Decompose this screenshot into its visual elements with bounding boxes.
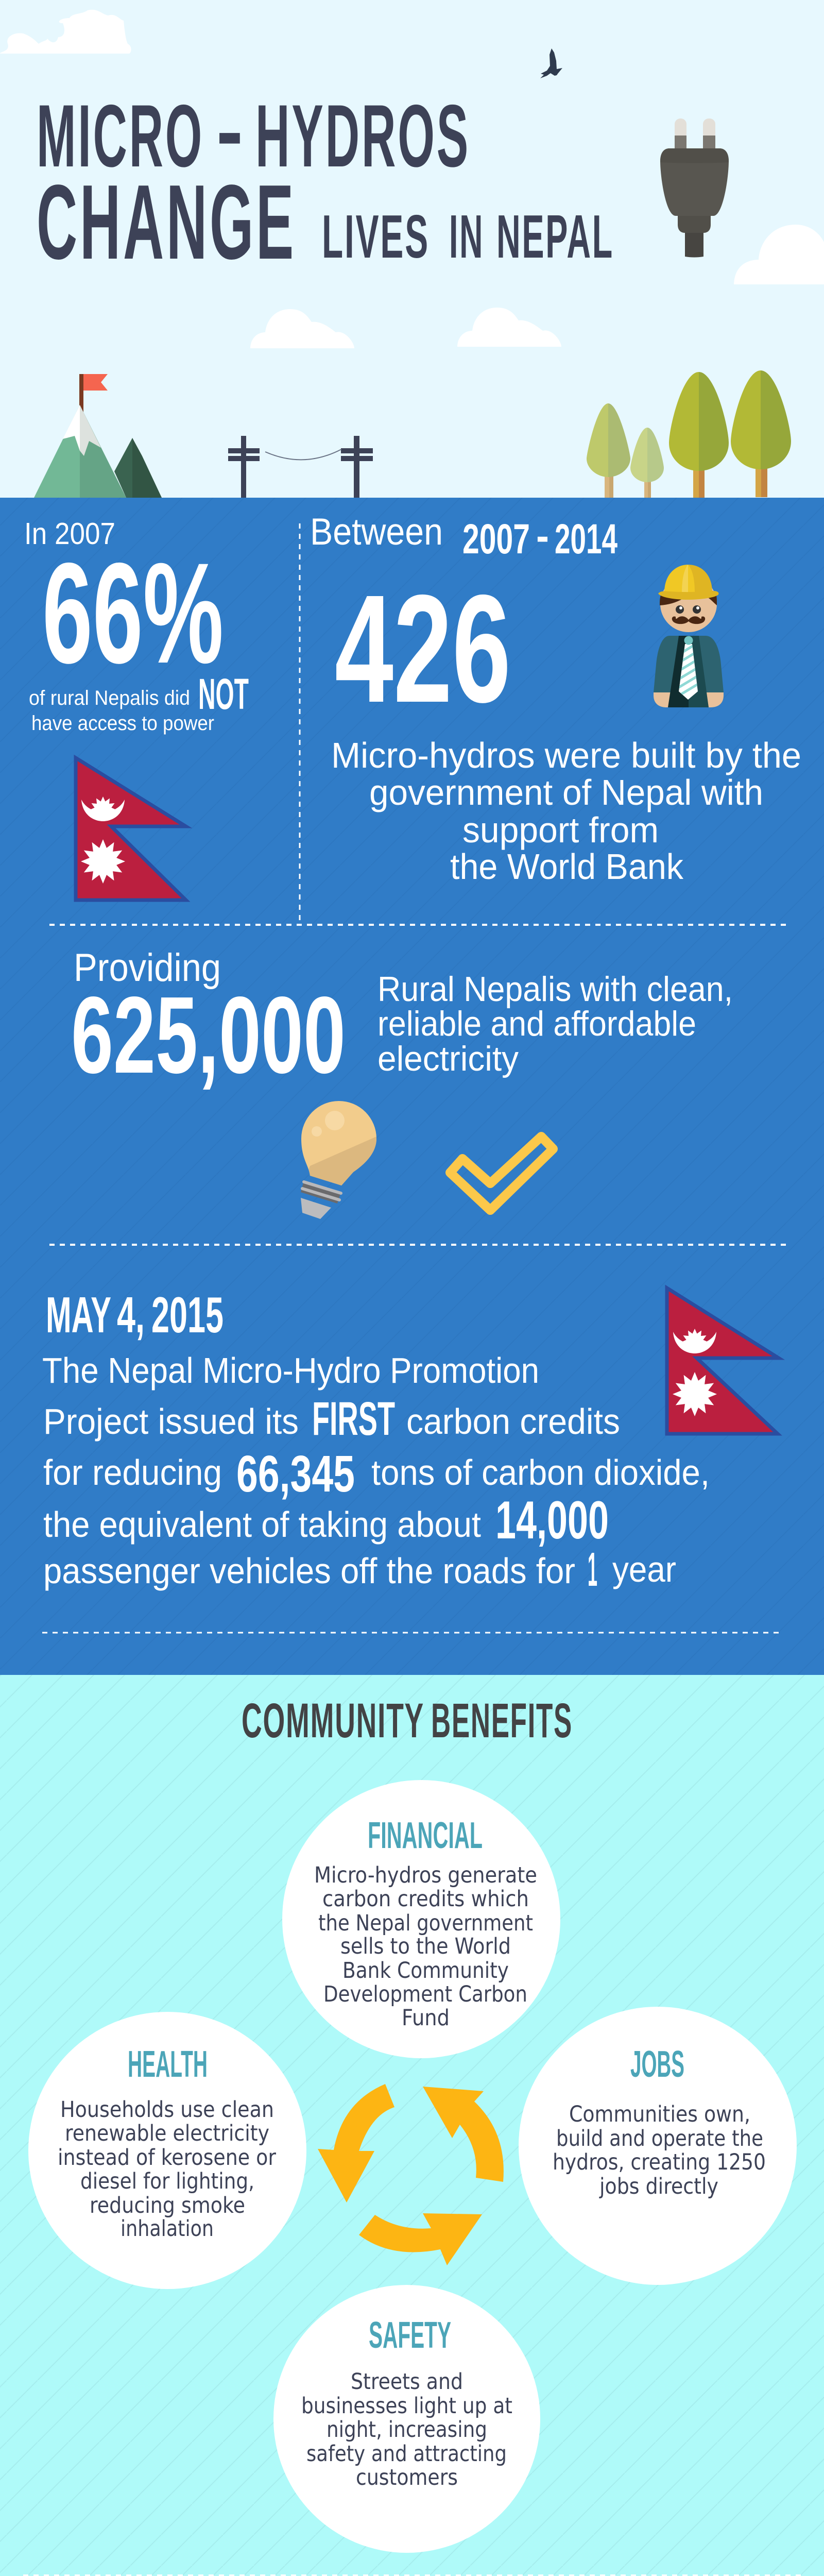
title: IN xyxy=(449,202,484,271)
panel: financial circle: Micro-hydros generate xyxy=(314,1862,537,1888)
stat: 625,000 block xyxy=(71,946,733,1096)
title: MICRO xyxy=(37,87,204,185)
stat: 625,000 block: Rural Nepalis with clean, xyxy=(377,970,733,1009)
heading: community benefits: BENEFITS xyxy=(431,1693,573,1748)
text block: May 4, 2015 carbon credits xyxy=(42,1286,710,1596)
icon: check mark xyxy=(450,1137,553,1210)
panel: health circle xyxy=(28,2012,306,2289)
stat: 625,000 block: electricity xyxy=(377,1039,519,1078)
panel: jobs circle: jobs directly xyxy=(599,2174,718,2199)
panel: safety circle: safety and attracting xyxy=(306,2441,507,2467)
stat: 426 micro-hydros block: 2014 xyxy=(555,516,617,563)
stat: 625,000 block: 625,000 xyxy=(71,974,346,1096)
panel: safety circle: businesses light up at xyxy=(301,2393,512,2419)
icon: Nepal flag small panel xyxy=(76,758,186,900)
stat: 66 percent block: of rural Nepalis did xyxy=(29,687,190,709)
horizontal dashed divider 4 xyxy=(23,2574,801,2576)
panel: financial circle xyxy=(282,1780,560,2058)
panel: health circle: HEALTH xyxy=(128,2044,208,2085)
text block: May 4, 2015 carbon credits: 1 xyxy=(588,1543,597,1596)
text block: May 4, 2015 carbon credits: 14,000 xyxy=(495,1490,609,1550)
panel: jobs circle xyxy=(519,2007,797,2285)
icon: mountains with flag xyxy=(34,374,162,498)
text block: May 4, 2015 carbon credits: 66,345 xyxy=(236,1445,355,1503)
horizontal dashed divider 2 xyxy=(49,1244,786,1246)
icon: trees xyxy=(587,370,791,498)
panel: health circle: instead of kerosene or xyxy=(58,2145,276,2171)
stat: 426 micro-hydros block: government of Nepal with xyxy=(369,772,763,812)
stat: 426 micro-hydros block xyxy=(310,511,801,887)
stat: 426 micro-hydros block: Micro-hydros were built by the xyxy=(331,735,801,775)
icon: light bulb xyxy=(301,1101,376,1219)
icon: Nepal flag large xyxy=(667,1288,779,1434)
stat: 66 percent block: have access to power xyxy=(31,712,214,735)
horizontal dashed divider 3 xyxy=(42,1632,779,1633)
panel: safety circle: Streets and xyxy=(351,2369,463,2395)
panel: safety circle: customers xyxy=(356,2465,458,2490)
text block: May 4, 2015 carbon credits: 2015 xyxy=(151,1286,224,1343)
text block: May 4, 2015 carbon credits: MAY xyxy=(46,1286,111,1343)
panel: financial circle: FINANCIAL xyxy=(368,1815,483,1856)
panel: sky header xyxy=(0,0,824,498)
stat: 426 micro-hydros block: 426 xyxy=(335,563,511,735)
text block: May 4, 2015 carbon credits: tons of carbon dioxide, xyxy=(371,1452,710,1493)
panel: health circle: diesel for lighting, xyxy=(80,2168,254,2194)
panel: financial circle: carbon credits which xyxy=(322,1886,529,1912)
text block: May 4, 2015 carbon credits: Project issued its xyxy=(43,1401,299,1442)
panel: jobs circle: build and operate the xyxy=(556,2126,763,2151)
icon: cloud middle left xyxy=(250,309,354,348)
title: CHANGE xyxy=(37,163,296,281)
stat: 426 micro-hydros block: 2007 xyxy=(462,516,530,563)
panel: jobs circle: Communities own, xyxy=(569,2102,750,2127)
panel: jobs circle: JOBS xyxy=(630,2044,684,2085)
stat: 66 percent block: In 2007 xyxy=(24,517,115,551)
panel: jobs circle: hydros, creating 1250 xyxy=(553,2149,766,2175)
icon: power poles and wire xyxy=(228,436,373,498)
vertical dashed divider xyxy=(299,523,301,920)
panel: community benefits background xyxy=(0,1675,824,2576)
icon: cloud middle right xyxy=(457,308,561,347)
stat: 66 percent block xyxy=(24,517,249,735)
stat: 625,000 block: reliable and affordable xyxy=(377,1004,696,1043)
stat: 426 micro-hydros block: - xyxy=(536,513,549,560)
heading: community benefits: COMMUNITY xyxy=(242,1693,424,1748)
panel: financial circle: sells to the World xyxy=(340,1934,511,1959)
panel: health circle: reducing smoke xyxy=(90,2193,245,2218)
icon: cloud right xyxy=(734,225,824,284)
icon: power plug xyxy=(660,118,729,258)
text block: May 4, 2015 carbon credits: 4, xyxy=(117,1286,145,1343)
panel: health circle: renewable electricity xyxy=(65,2121,269,2146)
icon: cloud top left xyxy=(0,10,131,54)
panel: financial circle: Bank Community xyxy=(342,1958,509,1984)
title: NEPAL xyxy=(496,202,614,271)
text block: May 4, 2015 carbon credits: passenger vehicles off the roads for xyxy=(43,1551,575,1591)
stat: 66 percent block: NOT xyxy=(198,670,249,718)
text block: May 4, 2015 carbon credits: The Nepal Micro-Hydro Promotion xyxy=(42,1350,539,1391)
text block: May 4, 2015 carbon credits: for reducing xyxy=(43,1452,222,1493)
horizontal dashed divider 1 xyxy=(49,924,786,926)
arrows: benefit cycle xyxy=(318,2084,504,2265)
title: - xyxy=(216,81,243,180)
icon: engineer with hard hat xyxy=(654,565,724,707)
stat: 426 micro-hydros block: support from xyxy=(462,810,659,850)
text block: May 4, 2015 carbon credits: the equivalent of taking about xyxy=(43,1504,481,1545)
text block: May 4, 2015 carbon credits: carbon credits xyxy=(406,1401,620,1442)
title: HYDROS xyxy=(255,87,470,185)
stat: 625,000 block: Providing xyxy=(74,946,221,990)
panel: financial circle: Development Carbon xyxy=(323,1981,527,2007)
panel: financial circle: the Nepal government xyxy=(318,1910,533,1936)
stat: 426 micro-hydros block: Between xyxy=(310,511,443,553)
panel: financial circle: Fund xyxy=(402,2005,450,2031)
icon: bird xyxy=(540,48,562,78)
title: LIVES xyxy=(322,202,430,271)
text block: May 4, 2015 carbon credits: FIRST xyxy=(312,1393,395,1445)
panel: safety circle: SAFETY xyxy=(369,2315,451,2356)
panel: safety circle: night, increasing xyxy=(327,2417,487,2443)
panel: safety circle xyxy=(273,2285,540,2553)
panel: health circle: Households use clean xyxy=(60,2097,274,2123)
stat: 66 percent block: 66% xyxy=(42,533,224,693)
panel: health circle: inhalation xyxy=(121,2216,214,2242)
title xyxy=(37,81,614,281)
panel: blue stats background xyxy=(0,498,824,1675)
text block: May 4, 2015 carbon credits: year xyxy=(612,1549,676,1589)
stat: 426 micro-hydros block: the World Bank xyxy=(450,846,684,887)
